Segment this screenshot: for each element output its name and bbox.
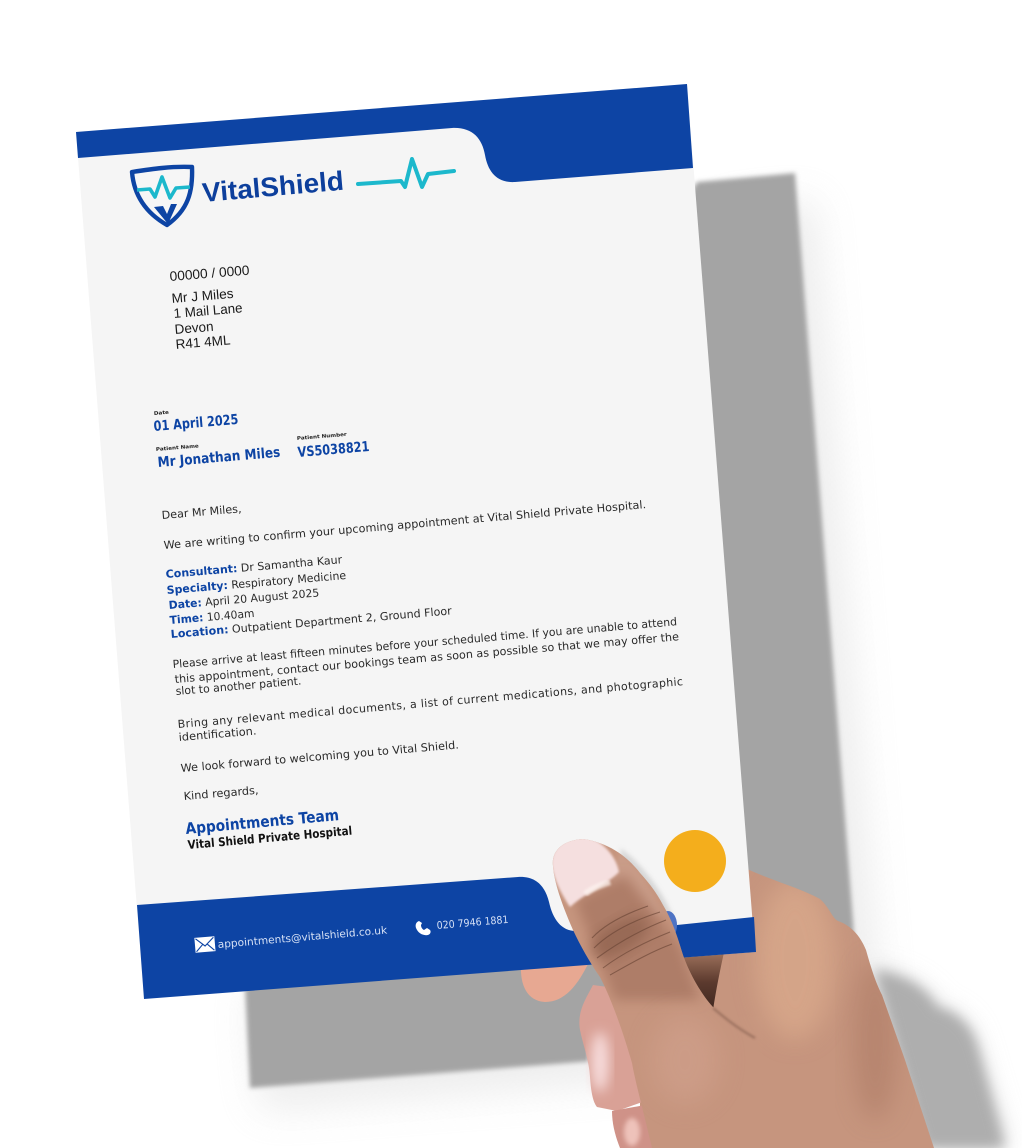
thumb and palm base (552, 839, 714, 1148)
paper sheet (76, 84, 755, 998)
icon: shield (132, 167, 192, 225)
gap between thumb and palm (672, 948, 725, 1010)
address block: R41 4ML (175, 332, 232, 352)
icon: envelope (194, 936, 216, 953)
letter body: Location: Outpatient Department 2, Ground Floor (170, 604, 453, 641)
reference number: 00000 / 0000 (169, 263, 250, 284)
letter body: Bring any relevant medical documents, a list of current medications, and photographic (177, 675, 683, 731)
patient details: Mr Jonathan Miles (157, 445, 281, 471)
patient details: VS5038821 (297, 439, 370, 461)
logo (132, 159, 454, 225)
address block: Devon (174, 319, 214, 337)
web crease (713, 1008, 755, 1038)
address block (171, 286, 243, 352)
patient details: Date (154, 410, 170, 417)
footer contact details (194, 914, 509, 953)
letter body: Please arrive at least fifteen minutes before your scheduled time. If you are unable to attend (172, 615, 677, 671)
letter body: Consultant: Dr Samantha Kaur (165, 553, 343, 581)
yellow circle (664, 830, 726, 892)
blue blob beside thumb (659, 911, 677, 939)
shadow of paper on wall (245, 173, 885, 1110)
icon: phone (416, 921, 431, 935)
letter body: We look forward to welcoming you to Vital Shield. (180, 738, 459, 775)
icon: pulse line (358, 159, 454, 187)
letter body: this appointment, contact our bookings team as soon as possible so that we may offer the (174, 630, 680, 686)
patient details: Patient Name (156, 443, 200, 453)
header blue band (76, 84, 693, 182)
letter body: slot to another patient. (175, 674, 302, 698)
thumb pale side (618, 854, 650, 898)
letter body: We are writing to confirm your upcoming appointment at Vital Shield Private Hospital. (163, 498, 647, 552)
knuckle shade (588, 915, 650, 960)
thumb mid tone (575, 875, 700, 1000)
finger under the paper (521, 960, 590, 1002)
patient details: Patient Number (297, 432, 348, 442)
patient details (153, 410, 370, 471)
letter body: Dear Mr Miles, (161, 502, 242, 522)
signature (185, 806, 353, 852)
index finger (579, 985, 648, 1111)
thumb shadow on paper (620, 848, 672, 925)
knuckle wrinkles (592, 906, 672, 975)
wordmark: VitalShield (201, 166, 345, 208)
letter body: identification. (178, 725, 257, 744)
patient details: 01 April 2025 (153, 412, 239, 435)
phone number: 020 7946 1881 (436, 914, 509, 932)
letter body (161, 498, 683, 803)
lower finger (612, 1105, 660, 1148)
address block: Mr J Miles (171, 286, 234, 306)
shadow of hand on wall (870, 968, 1007, 1148)
letter body: Kind regards, (183, 784, 259, 803)
thumbnail (552, 836, 619, 907)
email: appointments@vitalshield.co.uk (217, 925, 388, 951)
signature: Vital Shield Private Hospital (187, 824, 353, 852)
letter body: Date: April 20 August 2025 (168, 586, 320, 612)
signature: Appointments Team (185, 806, 340, 838)
hand behind the paper (521, 860, 940, 1148)
hand thumb over the paper (552, 839, 714, 1148)
back of hand (640, 860, 940, 1148)
address block: 1 Mail Lane (173, 300, 243, 321)
footer blue band (137, 877, 756, 999)
palm light tone (670, 1041, 700, 1079)
letter paper (76, 84, 756, 999)
letter body: Specialty: Respiratory Medicine (166, 569, 347, 597)
nail ridge highlight (585, 882, 610, 894)
letter body: Time: 10.40am (169, 607, 255, 627)
